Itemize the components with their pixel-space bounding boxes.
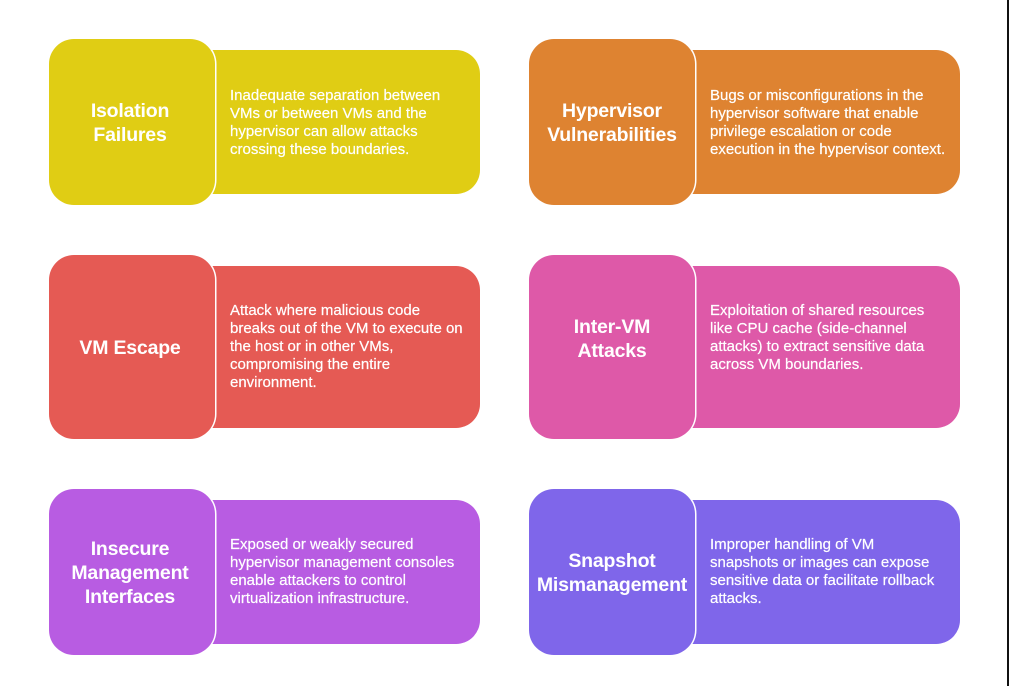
description text	[230, 87, 440, 158]
heading: Inter-VM Attacks: Inter-VM	[574, 316, 650, 338]
heading: Snapshot Mismanagement: Mismanagement	[537, 574, 687, 596]
description text	[710, 302, 924, 373]
description panel	[199, 50, 480, 194]
heading: Hypervisor Vulnerabilities	[529, 39, 695, 205]
description text: Attack where malicious code	[230, 302, 420, 319]
description text	[230, 536, 454, 607]
description panel	[679, 500, 960, 644]
card: Isolation Failures	[49, 39, 480, 205]
heading: Insecure Management Interfaces	[49, 489, 215, 655]
description text	[230, 302, 463, 391]
card: Snapshot Mismanagement	[529, 489, 960, 655]
description text: privilege escalation or code	[710, 123, 892, 140]
heading: Snapshot Mismanagement	[529, 489, 695, 655]
heading: Isolation Failures: Isolation	[91, 100, 169, 122]
heading: Snapshot Mismanagement: Snapshot	[568, 550, 656, 572]
description text: compromising the entire	[230, 356, 390, 373]
description text: across VM boundaries.	[710, 356, 863, 373]
heading: VM Escape	[49, 255, 215, 439]
description text: attacks) to extract sensitive data	[710, 338, 924, 355]
heading: VM Escape: VM Escape	[79, 337, 181, 359]
card: VM Escape	[49, 255, 480, 439]
description text: the host or in other VMs,	[230, 338, 393, 355]
description text	[710, 536, 934, 607]
description text: hypervisor can allow attacks	[230, 123, 418, 140]
description text: VMs or between VMs and the	[230, 105, 427, 122]
heading: Inter-VM Attacks	[529, 255, 695, 439]
description text: Bugs or misconfigurations in the	[710, 87, 923, 104]
heading: Hypervisor Vulnerabilities: Vulnerabilities	[547, 124, 677, 146]
description text: environment.	[230, 374, 317, 391]
description text: sensitive data or facilitate rollback	[710, 572, 934, 589]
description text: breaks out of the VM to execute on	[230, 320, 463, 337]
heading: Insecure Management Interfaces: Insecure	[91, 538, 169, 560]
description text: attacks.	[710, 590, 762, 607]
description text: Exploitation of shared resources	[710, 302, 924, 319]
heading: Inter-VM Attacks: Attacks	[577, 340, 647, 362]
description text: snapshots or images can expose	[710, 554, 929, 571]
heading: Insecure Management Interfaces: Interfaces	[85, 586, 175, 608]
description panel	[679, 50, 960, 194]
description text	[710, 87, 945, 158]
description panel	[199, 500, 480, 644]
card: Hypervisor Vulnerabilities	[529, 39, 960, 205]
description text: crossing these boundaries.	[230, 141, 409, 158]
description text: enable attackers to control	[230, 572, 406, 589]
card: Inter-VM Attacks	[529, 255, 960, 439]
heading: Insecure Management Interfaces: Management	[71, 562, 189, 584]
description panel	[679, 266, 960, 428]
description text: execution in the hypervisor context.	[710, 141, 945, 158]
heading: Hypervisor Vulnerabilities: Hypervisor	[562, 100, 662, 122]
description text: Exposed or weakly secured	[230, 536, 413, 553]
heading: Isolation Failures	[49, 39, 215, 205]
card: Insecure Management Interfaces	[49, 489, 480, 655]
heading: Isolation Failures: Failures	[93, 124, 167, 146]
description text: hypervisor software that enable	[710, 105, 918, 122]
description text: Improper handling of VM	[710, 536, 874, 553]
description text: Inadequate separation between	[230, 87, 440, 104]
description text: virtualization infrastructure.	[230, 590, 409, 607]
description panel	[199, 266, 480, 428]
description text: like CPU cache (side-channel	[710, 320, 907, 337]
description text: hypervisor management consoles	[230, 554, 454, 571]
